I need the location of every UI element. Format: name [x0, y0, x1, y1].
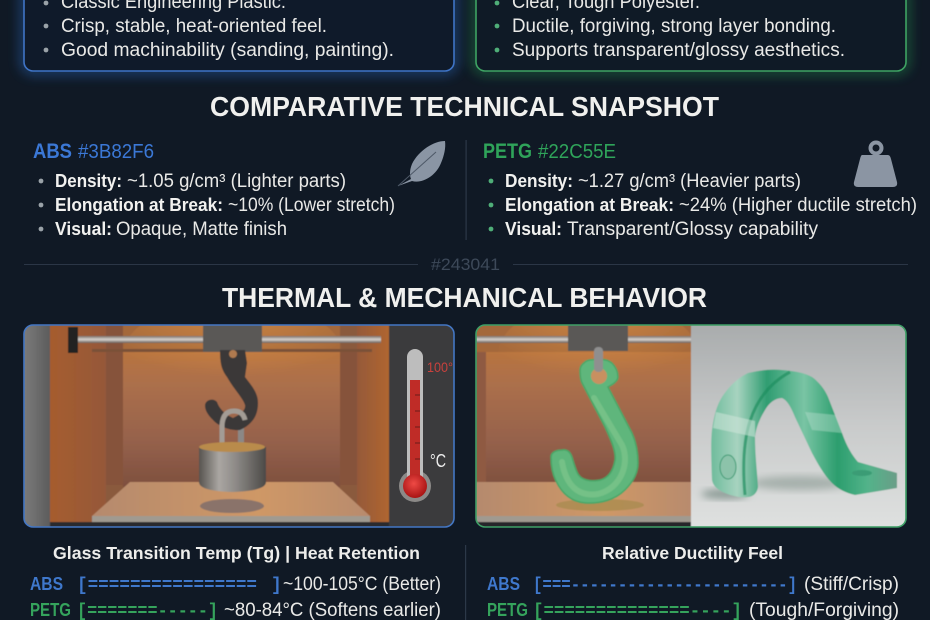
panel: ABS overview	[24, 0, 454, 71]
panel: PETG snapshot: Transparent/Glossy capability	[567, 219, 818, 240]
panel: PETG snapshot	[483, 140, 917, 240]
divider: snapshot columns	[466, 140, 467, 240]
chart: glass transition temperature: [================	[77, 576, 257, 596]
bent PETG sample	[711, 370, 897, 497]
panel: ABS snapshot: ABS	[33, 140, 72, 163]
chart: relative ductility feel	[487, 543, 899, 620]
icon: weight	[854, 142, 897, 187]
panel: PETG snapshot: Density:	[505, 170, 573, 191]
panel: PETG snapshot: ~24% (Higher ductile stretch)	[679, 195, 917, 216]
panel: PETG snapshot: Visual:	[505, 218, 562, 239]
heading: thermal and mechanical behavior: THERMAL & MECHANICAL BEHAVIOR	[222, 282, 707, 313]
chart: relative ductility feel: (Stiff/Crisp)	[804, 574, 899, 595]
steel weight	[199, 447, 266, 492]
divider with colour label: #243041	[431, 255, 500, 274]
panel: PETG overview	[476, 0, 906, 71]
green hook	[551, 359, 638, 503]
panel: ABS snapshot: Opaque, Matte finish	[116, 219, 287, 240]
panel: ABS snapshot: ~1.05 g/cm³ (Lighter parts)	[127, 171, 346, 192]
panel: ABS snapshot: Density:	[55, 170, 122, 191]
chart: glass transition temperature: ]	[271, 576, 282, 596]
chart: glass transition temperature: ~100-105°C (Better)	[283, 574, 441, 595]
chart: relative ductility feel: [===-----------------------]	[533, 576, 797, 596]
icon: thermometer: °C	[430, 451, 446, 471]
chart: relative ductility feel: ABS	[487, 574, 520, 594]
icon: thermometer: 100°	[427, 359, 453, 375]
divider: chart columns	[465, 545, 466, 620]
panel: PETG snapshot: Elongation at Break:	[505, 194, 674, 215]
image panel: PETG hook and bent sample	[475, 324, 907, 528]
dark hook	[205, 350, 258, 430]
panel: ABS snapshot: #3B82F6	[78, 141, 154, 163]
panel: PETG snapshot: PETG	[483, 140, 532, 163]
shackle	[222, 411, 245, 447]
chart: glass transition temperature: ABS	[30, 574, 63, 594]
panel: PETG overview: Ductile, forgiving, strong layer bonding.	[512, 16, 836, 37]
chart: glass transition temperature: PETG	[30, 600, 71, 620]
chart: relative ductility feel: PETG	[487, 600, 528, 620]
panel: ABS snapshot: Visual:	[55, 218, 112, 239]
panel: PETG overview: Supports transparent/glossy aesthetics.	[512, 40, 845, 61]
icon: thermometer	[399, 349, 453, 502]
panel: ABS overview: Good machinability (sanding, painting).	[61, 40, 394, 61]
panel: PETG snapshot: ~1.27 g/cm³ (Heavier parts)	[578, 171, 801, 192]
panel: ABS overview: Crisp, stable, heat-oriented feel.	[61, 16, 327, 37]
panel: ABS snapshot: Elongation at Break:	[55, 194, 223, 215]
heading: comparative technical snapshot: COMPARATIVE TECHNICAL SNAPSHOT	[210, 91, 719, 122]
image panel: ABS hook in heated chamber	[23, 324, 455, 528]
panel: ABS snapshot	[33, 140, 395, 240]
chart: glass transition temperature: Glass Transition Temp (Tg) | Heat Retention	[53, 543, 420, 563]
icon: feather	[398, 141, 445, 186]
chart: glass transition temperature	[30, 543, 441, 620]
panel: ABS snapshot: ~10% (Lower stretch)	[228, 195, 395, 216]
chart: relative ductility feel: Relative Ductility Feel	[602, 543, 783, 563]
panel: PETG snapshot: #22C55E	[538, 141, 616, 163]
